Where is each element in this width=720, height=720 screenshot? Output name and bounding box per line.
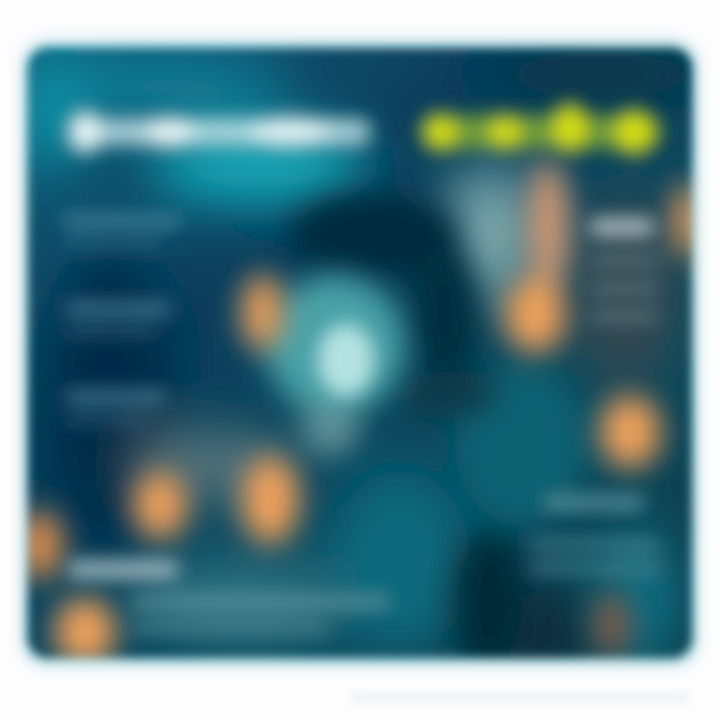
left text block: middle	[66, 302, 170, 336]
orange accents	[18, 159, 702, 666]
left text block: lower	[66, 390, 166, 424]
right text block	[590, 220, 660, 321]
left text block: top	[62, 214, 182, 248]
footer caption	[350, 692, 690, 704]
figure: face	[265, 275, 405, 456]
title highlights: four yellow circles	[422, 104, 660, 154]
figure: pale centre icon	[318, 324, 374, 396]
title text band	[69, 112, 370, 152]
lower right text block	[530, 496, 660, 573]
lower left text block	[68, 562, 390, 632]
figure: hair	[290, 193, 585, 670]
